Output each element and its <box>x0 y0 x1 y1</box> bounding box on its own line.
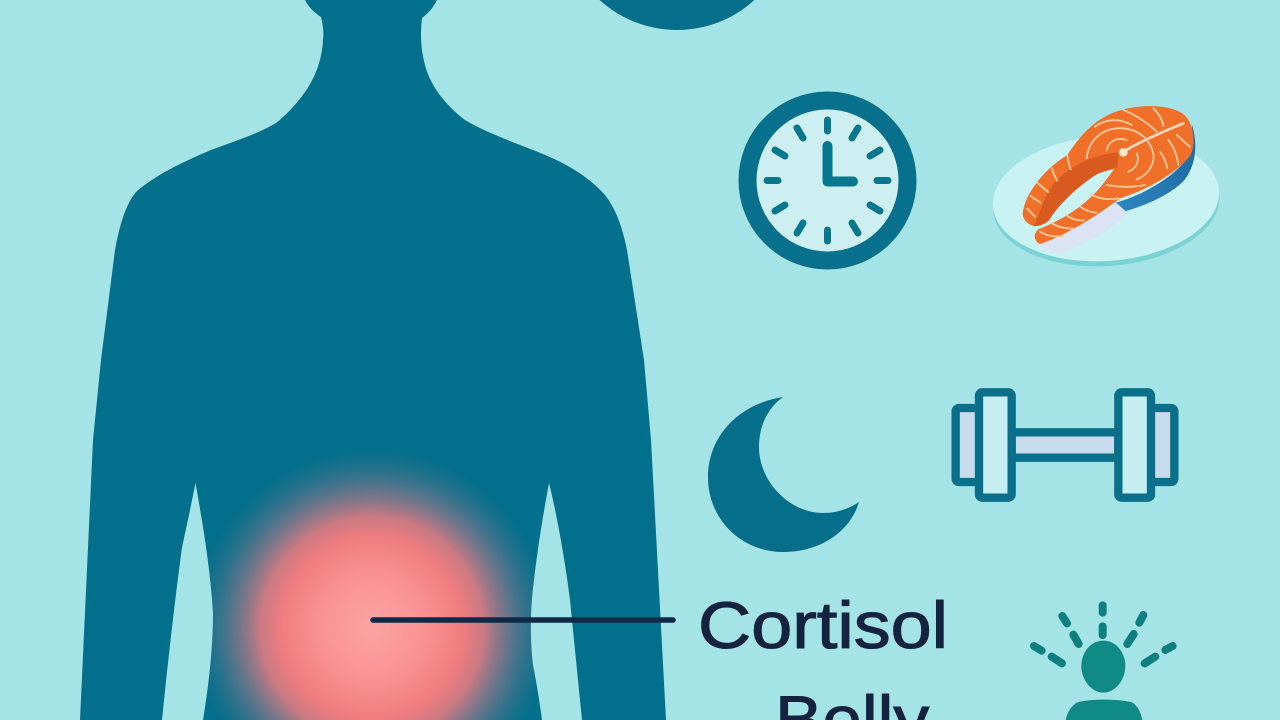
plate <box>989 128 1224 274</box>
left arm gap <box>162 483 213 720</box>
icon: dumbbell <box>956 392 1174 498</box>
salmon bone <box>1119 148 1128 157</box>
pointer line <box>373 617 673 623</box>
icon: person with radiating dashes <box>1034 605 1173 720</box>
label: Cortisol Belly: Cortisol <box>698 588 948 662</box>
body silhouette <box>80 0 666 720</box>
salmon flesh <box>1023 106 1194 244</box>
icon: salmon on plate <box>989 106 1224 274</box>
right arm gap <box>531 483 582 720</box>
icon: clock <box>748 100 908 260</box>
salmon skin <box>1115 125 1195 212</box>
salmon inner band <box>1033 153 1119 226</box>
label: Cortisol Belly <box>698 588 948 720</box>
belly glow <box>192 448 552 720</box>
icon: crescent moon <box>708 397 859 552</box>
icon: top circle (cropped) <box>562 0 792 30</box>
salmon fat lines <box>1027 108 1190 236</box>
